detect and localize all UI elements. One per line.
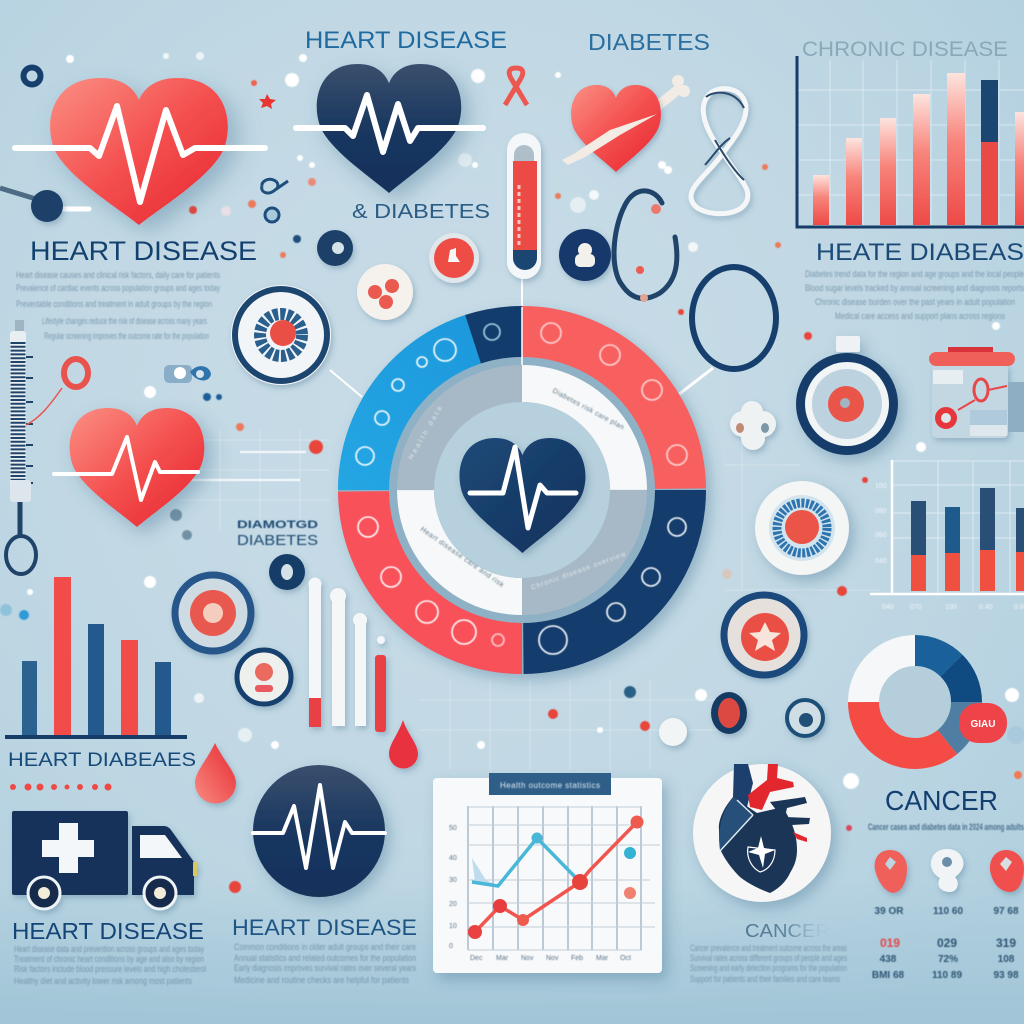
- background bottom shade: [0, 880, 1024, 1024]
- text block: bottom left description: [14, 942, 416, 986]
- title: diabetes top: DIABETES: [588, 29, 710, 55]
- icon: ring badge with red flower: [175, 575, 251, 651]
- icon: white lens badge: [755, 481, 849, 575]
- red line: [475, 822, 637, 932]
- icon: white badge red ring: [429, 233, 479, 283]
- center heart: [460, 438, 585, 553]
- axis labels: Feb: [571, 955, 583, 962]
- text block: bottom left description: Treatment of chronic heart conditions by age and also by region: [14, 954, 204, 964]
- stats: ribbon labels: 108: [998, 954, 1015, 965]
- icon: red ribbon: [505, 68, 527, 105]
- text block: heart disease description: [16, 270, 220, 341]
- text block: heart disease description: Heart disease causes and clinical risk factors, daily care for patients: [16, 270, 220, 280]
- heading: heart disease left: HEART DISEASE: [30, 236, 257, 266]
- connector right: [678, 368, 713, 395]
- text block: faded description: Survival rates across different groups of people and ages: [690, 953, 847, 963]
- stats: ribbon labels: 019: [880, 936, 900, 950]
- axis labels: Dec: [470, 955, 483, 962]
- background grid: [180, 430, 880, 770]
- bar chart: right middle: 040: [875, 558, 887, 565]
- icon: blood drop right: [389, 720, 418, 768]
- text block: bottom left description: Medicine and routine checks are helpful for patients: [234, 975, 409, 985]
- title: chronic disease: CHRONIC DISEASE: [802, 38, 1008, 61]
- text block: heart disease description: Preventable conditions and treatment in adult groups by the region: [16, 299, 212, 309]
- chart header: [489, 773, 611, 795]
- inner ring small text: Health data: [408, 405, 444, 461]
- icon: white badge red flower: [357, 264, 413, 320]
- axis labels: Nov: [521, 955, 534, 962]
- icon: bone heart: [562, 75, 690, 172]
- icon: small navy ring: [265, 208, 279, 222]
- icon: pill goggles: [164, 365, 211, 383]
- text block: faded description: Screening and early detection programs for the population: [690, 963, 847, 973]
- icon: navy dot with hole: [317, 230, 353, 266]
- text block: bottom left description: Common conditions in older adult groups and their care: [234, 942, 416, 952]
- axis labels: 50: [449, 825, 457, 832]
- axis labels: 10: [449, 923, 457, 930]
- text block: heart disease description: Regular screening improves the outcome rate for the population: [44, 331, 209, 341]
- icon: stethoscope open tube: [614, 191, 677, 302]
- icon: small ring: [787, 700, 823, 736]
- row of red dots: [10, 784, 112, 790]
- bar chart: right middle: 070: [910, 604, 922, 611]
- text block: bottom left description: Risk factors include blood pressure levels and high cholesterol: [14, 964, 206, 974]
- stats: ribbon labels: 438: [880, 954, 897, 965]
- chart: cancer donut: [842, 629, 1007, 775]
- bar chart: right middle: 080: [875, 508, 887, 515]
- text block: heart disease description: Prevalence of cardiac events across population groups and ages today: [16, 283, 220, 293]
- connector left: [330, 370, 362, 397]
- top divider: [521, 307, 523, 365]
- heading: heart disease bottom middle: HEART DISEASE: [232, 915, 417, 940]
- icon: navy dot: [269, 554, 305, 590]
- chart vertical grid: [468, 806, 641, 950]
- icon: medicine jar: [929, 347, 1024, 438]
- icon: navy ring badge with flower: [724, 595, 804, 675]
- icon: syringe: [6, 320, 36, 574]
- axis labels: 0: [449, 943, 453, 950]
- label: diagnosed diabetes: DIABETES: [237, 532, 318, 549]
- icon: white ribbon pin: [931, 849, 964, 892]
- bar chart: right middle: 0.8: [1014, 604, 1024, 611]
- bar chart: right middle: 040: [882, 604, 894, 611]
- stats: ribbon labels: 72%: [938, 954, 958, 965]
- icon: white blossom: [730, 401, 776, 450]
- stats: ribbon labels: 110 60: [933, 906, 963, 917]
- axis labels: 40: [449, 855, 457, 862]
- axis labels: Mar: [596, 955, 609, 962]
- bar chart: right middle: 060: [875, 532, 887, 539]
- stats: ribbon labels: 97 68: [993, 906, 1019, 917]
- icon: badge with flower: [231, 285, 331, 385]
- text block: bottom left description: Heart disease data and prevention across groups and ages today: [14, 944, 204, 954]
- icon: stethoscope ring: [692, 267, 776, 369]
- text block: bottom left description: Annual statistics and related outcomes for the population: [234, 953, 416, 963]
- data points: [468, 816, 644, 939]
- heading: heart disease bottom left: HEART DISEASE: [12, 918, 204, 944]
- icon: ribbon loop figure eight: [691, 89, 748, 214]
- chart: cancer donut: GIAU: [970, 719, 996, 730]
- icon: small navy loop: [262, 179, 288, 193]
- axis labels: Nov: [546, 955, 559, 962]
- icon: red heart left with pulse: [54, 408, 204, 527]
- center pulse: [470, 447, 576, 528]
- heading: heate diabeas: HEATE DIABEAS: [816, 239, 1024, 266]
- icon: small navy ring top left: [24, 68, 40, 84]
- heading: faded cancer: CANCER: [745, 921, 830, 941]
- inner ring segments: [416, 384, 628, 596]
- axis labels: 20: [449, 901, 457, 908]
- stats: ribbon labels: BMI 68: [872, 970, 905, 981]
- blue area smear: [472, 858, 498, 886]
- text block: faded description: Support for patients and their families and care teams: [690, 974, 840, 984]
- label: diagnosed diabetes: DIAMOTGD: [237, 519, 318, 531]
- chart horizontal grid: [468, 807, 660, 950]
- stats: ribbon labels: 029: [937, 936, 957, 950]
- text block: faded description: Cancer prevalence and treatment outcome across the areas: [690, 943, 847, 953]
- inner ring small text: Chronic disease overview: [530, 551, 628, 592]
- text block: heart disease description: Lifestyle changes reduce the risk of disease across many years: [42, 316, 207, 326]
- icon: ambulance: [12, 811, 197, 909]
- bar chart: right middle: 100: [875, 483, 887, 490]
- bar chart: right middle: 100: [945, 604, 957, 611]
- inner ring small text: [408, 388, 628, 592]
- label: diagnosed diabetes: [237, 519, 318, 549]
- chart: central donut: [322, 290, 722, 690]
- axis labels: Mar: [496, 955, 509, 962]
- bar chart: lower left: [5, 577, 187, 737]
- stats: ribbon labels: [872, 906, 1019, 981]
- icon: test tubes: [308, 578, 386, 732]
- icon: navy badge: [559, 229, 611, 281]
- icon: navy circle with pulse: [253, 765, 385, 897]
- outer ring segments: [322, 290, 722, 690]
- panel: line chart: Health outcome statistics: [500, 781, 600, 790]
- blue line: [472, 838, 580, 886]
- icon: blood drop left: [195, 743, 236, 804]
- icon: stethoscope head left: [0, 188, 89, 222]
- icon: small ring badge: [237, 650, 291, 704]
- bar chart: right middle: 0.40: [979, 604, 993, 611]
- bar chart: right middle: [870, 460, 1024, 611]
- icon: red heart with pulse: [15, 78, 265, 225]
- heading: and diabetes center: & DIABETES: [352, 201, 490, 223]
- axis labels: [449, 825, 631, 962]
- center disc: [434, 402, 610, 578]
- icon: thermometer tube: [507, 133, 541, 307]
- icon: red ribbon pin: [875, 850, 907, 893]
- icon: red star: [259, 94, 276, 109]
- bar chart: top right: [796, 56, 1024, 227]
- stats: ribbon labels: 93 98: [993, 970, 1019, 981]
- donut label pill: [959, 703, 1007, 743]
- icon: navy dark heart with pulse: [296, 64, 483, 193]
- icon: red ribbon pin right: [990, 850, 1024, 892]
- segment glyph marks: [356, 323, 687, 654]
- stats: ribbon labels: 39 OR: [875, 906, 904, 917]
- stats: ribbon labels: 110 89: [932, 970, 962, 981]
- text block: bottom left description: Early diagnosis improves survival rates over several years: [234, 963, 416, 973]
- heading: cancer: CANCER: [885, 785, 998, 816]
- panel: line chart: [433, 773, 662, 973]
- inner ring small text: Diabetes risk care plan: [551, 388, 625, 431]
- axis labels: Oct: [620, 955, 631, 962]
- text block: right description: [805, 269, 1024, 321]
- heading: heart diabeaes: HEART DIABEAES: [8, 750, 196, 771]
- axis labels: 30: [449, 877, 457, 884]
- inner ring small text: Heart disease care and risk: [419, 526, 505, 589]
- text block: faded description: [690, 943, 847, 984]
- icon: faint line right of heart: [190, 452, 306, 480]
- icon: white tooth: [659, 718, 687, 746]
- stats: ribbon labels: 319: [996, 936, 1016, 950]
- icon: anatomical heart: [693, 764, 831, 902]
- title: heart disease top: HEART DISEASE: [305, 27, 507, 54]
- icon: stopwatch: [796, 336, 898, 455]
- text block: bottom left description: Healthy diet and activity lower risk among most patients: [14, 976, 192, 986]
- icon: small navy badge red: [711, 692, 747, 734]
- icon: red tube loop: [26, 359, 88, 425]
